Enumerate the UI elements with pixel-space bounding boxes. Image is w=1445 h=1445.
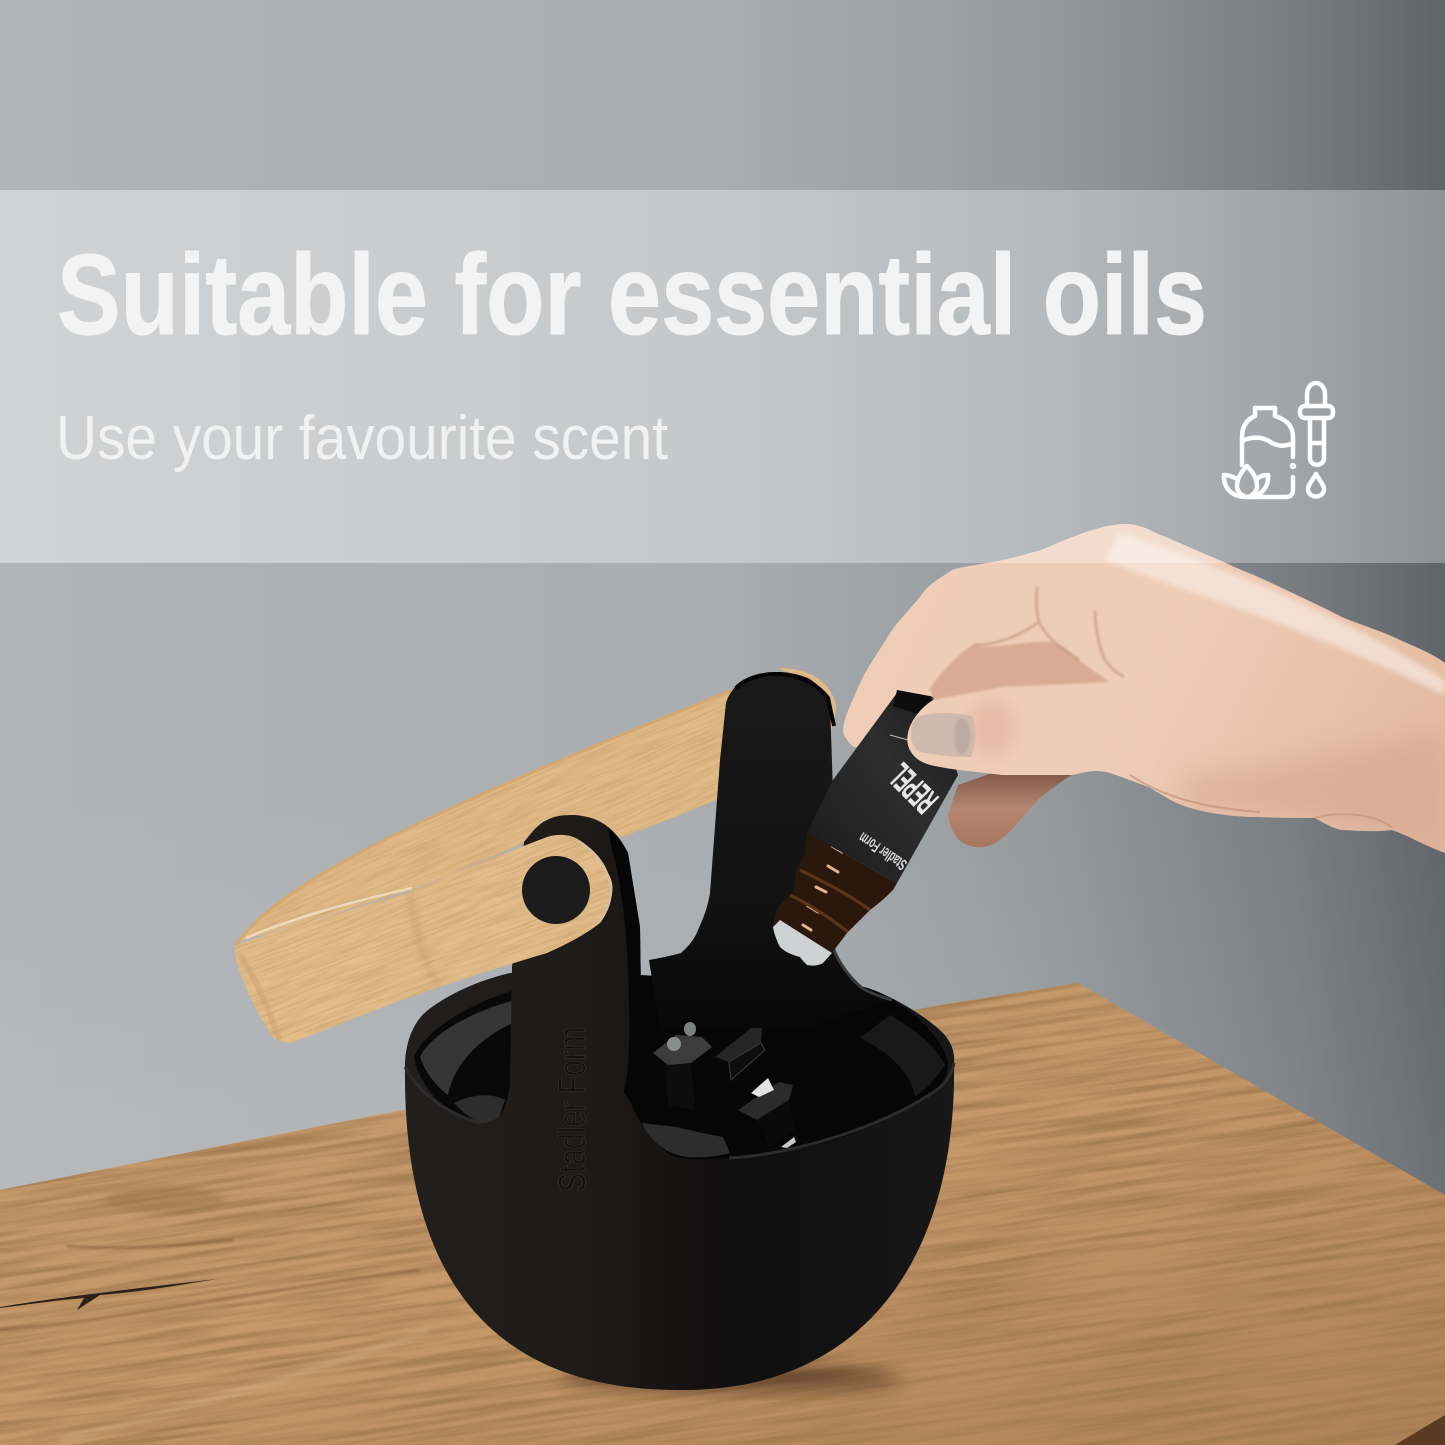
- diffuser bowl: [405, 672, 954, 1390]
- right interior of bowl: [631, 975, 948, 1159]
- bottle cap: [893, 690, 935, 716]
- oil bottle: [773, 690, 958, 966]
- dropper tip with oil drop: [773, 920, 832, 966]
- left interior of bowl: [414, 990, 515, 1123]
- thumbnail base: [954, 718, 970, 754]
- left rim ring: [420, 1000, 515, 1095]
- wood crack: [0, 1279, 217, 1310]
- amber glass neck: [773, 833, 897, 953]
- front stem: [499, 815, 646, 1170]
- label text brand: Stadler Form: [856, 828, 910, 873]
- table corner edge: [1395, 1415, 1445, 1445]
- neck ridges: [790, 870, 870, 932]
- black label: [807, 693, 958, 883]
- icon: essential oil bottle with dropper: [1224, 383, 1333, 497]
- glass highlights: [803, 846, 842, 930]
- label line: [890, 735, 908, 740]
- thumb tip tint: [968, 698, 1016, 758]
- tall rear paddle: [649, 672, 892, 1030]
- hand: palm and index finger: [843, 524, 1445, 853]
- label text REPEL: REPEL: [880, 756, 946, 821]
- bamboo handle: front strap: [234, 835, 612, 1043]
- stem foot curve: [642, 1123, 730, 1157]
- hand: thumb over bottle: [907, 682, 1200, 795]
- bamboo handle: back arc: [234, 668, 836, 947]
- bowl body: [405, 973, 954, 1390]
- handle pivot cap: [522, 856, 590, 924]
- rim highlight: [405, 1063, 954, 1158]
- stem glossy edge: [608, 827, 642, 1103]
- left inner flap: [454, 1095, 505, 1123]
- title: Suitable for essential oils: [57, 232, 1207, 359]
- translucent text band: [0, 190, 1445, 563]
- thumbnail: [911, 713, 975, 757]
- bowl shadow on table: [560, 1364, 900, 1392]
- hand: shading and creases: [930, 532, 1445, 853]
- right inner wall: [860, 1015, 945, 1097]
- internal mechanism: [653, 1022, 796, 1148]
- hand: lower fingers: [948, 770, 1072, 847]
- subtitle: Use your favourite scent: [56, 404, 668, 473]
- wooden table: [0, 983, 1445, 1445]
- brand emboss: Stadler Form: [552, 1027, 594, 1192]
